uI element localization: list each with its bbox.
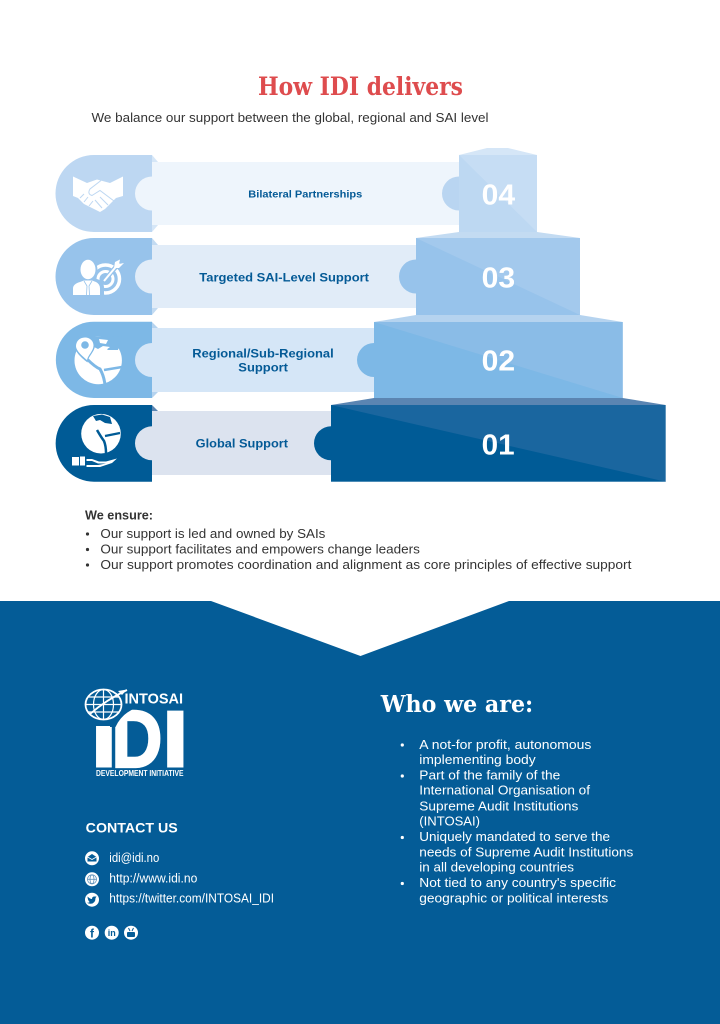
icon: handshake: [73, 176, 123, 212]
panel: level 02 regional support: Regional/Sub-Regional: [192, 347, 334, 361]
panel: level 02 regional support: [56, 315, 623, 398]
panel: level 02 regional support: 02: [482, 346, 515, 378]
icon: facebook: f: [90, 926, 95, 940]
icon: twitter: [85, 893, 99, 907]
panel: level 01 global support: [56, 398, 666, 482]
icon: linkedin: in: [108, 928, 116, 938]
text block: we ensure: Our support is led and owned by SAIs: [100, 526, 326, 541]
contact list: idi@idi.no: [109, 851, 159, 865]
panel: level 01 global support: Global Support: [196, 437, 288, 451]
text block: we ensure: [85, 508, 632, 572]
text block: we ensure: Our support promotes coordination and alignment as core principles of effective support: [100, 557, 632, 572]
subtitle: We balance our support between the global, regional and SAI level: [92, 110, 489, 125]
chart: stepped puzzle pyramid: [55, 148, 666, 482]
list: who we are: Uniquely mandated to serve the: [419, 830, 610, 844]
list: who we are: Not tied to any country's specific: [419, 876, 616, 890]
list: who we are: [401, 738, 633, 906]
list: who we are: geographic or political interests: [419, 892, 608, 906]
heading: who we are: Who we are:: [380, 691, 533, 718]
contact list: http://www.idi.no: [109, 872, 197, 886]
logo: INTOSAI IDI: [86, 690, 191, 785]
panel: level 03 targeted SAI-level support: Targeted SAI-Level Support: [199, 270, 369, 284]
icon: hand holding globe: [72, 414, 121, 467]
list: who we are: A not-for profit, autonomous: [419, 738, 591, 752]
panel: level 03 targeted SAI-level support: 03: [482, 262, 515, 294]
list: who we are: Part of the family of the: [419, 769, 560, 783]
list: who we are: needs of Supreme Audit Institutions: [419, 846, 633, 860]
logo: INTOSAI IDI: INTOSAI: [124, 690, 183, 707]
list: who we are: implementing body: [419, 753, 537, 767]
panel: level 01 global support: 01: [482, 430, 515, 462]
list: who we are: Supreme Audit Institutions: [419, 800, 578, 814]
panel: level 02 regional support: Support: [238, 361, 288, 375]
contact list: https://twitter.com/INTOSAI_IDI: [109, 892, 274, 906]
logo: INTOSAI IDI: I: [160, 692, 191, 785]
heading: contact us: CONTACT US: [86, 821, 178, 836]
social icons: [85, 926, 138, 940]
list: who we are: International Organisation of: [419, 784, 591, 798]
contact list: [85, 851, 274, 907]
panel: level 04 bilateral partnerships: [55, 148, 537, 232]
panel: level 04 bilateral partnerships: Bilateral Partnerships: [248, 189, 362, 201]
list: who we are: in all developing countries: [419, 861, 574, 875]
icon: person and target: [71, 258, 124, 297]
text block: we ensure: Our support facilitates and empowers change leaders: [100, 541, 420, 556]
title: How IDI delivers: [258, 72, 463, 101]
icon: mail: [85, 851, 99, 865]
panel: level 04 bilateral partnerships: 04: [482, 179, 515, 211]
icon: web globe: [85, 872, 99, 886]
icon: globe with map pin: [74, 336, 122, 385]
logo: INTOSAI IDI: DEVELOPMENT INITIATIVE: [96, 769, 184, 778]
text block: we ensure: We ensure:: [85, 508, 153, 522]
list: who we are: (INTOSAI): [419, 814, 480, 828]
logo: INTOSAI IDI: I: [89, 713, 119, 781]
panel: level 03 targeted SAI-level support: [55, 232, 580, 315]
icon: youtube: [124, 926, 138, 940]
logo: INTOSAI IDI: D: [112, 694, 162, 785]
panel: footer background with chevron: [0, 601, 720, 1024]
